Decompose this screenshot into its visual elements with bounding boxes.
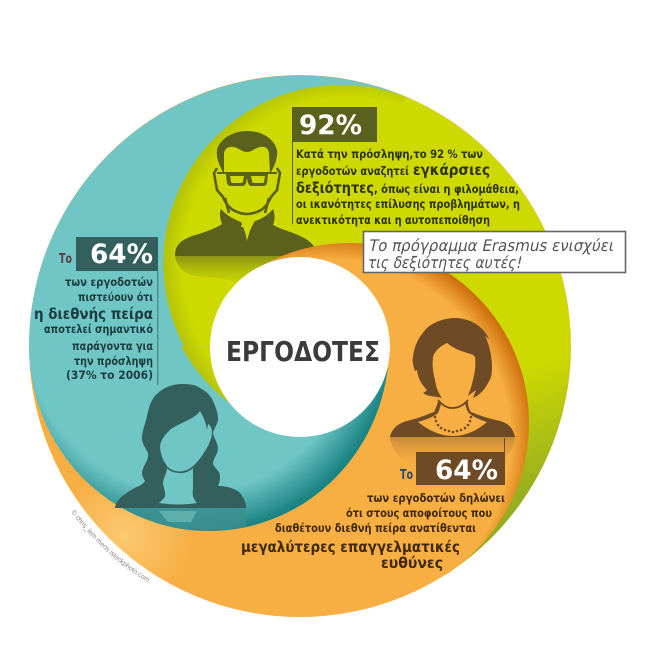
woman silhouette xyxy=(115,384,246,508)
text block: international experience: την πρόσληψη xyxy=(74,354,153,368)
stat box 64%: 64% xyxy=(90,239,153,270)
panel: left 64 percent xyxy=(34,237,158,385)
label To: Το xyxy=(400,468,413,483)
text block: responsibilities: διαθέτουν διεθνή πείρα ανατίθενται xyxy=(275,521,476,535)
stat box 64% xyxy=(416,452,505,486)
title: ΕΡΓΟΔΟΤΕΣ xyxy=(226,336,380,368)
text block: international experience: παράγοντα για xyxy=(72,339,153,353)
icon: woman with long hair xyxy=(115,384,246,535)
callout: Erasmus: τις δεξιότητες αυτές! xyxy=(366,253,524,272)
text block: responsibilities: ότι στους αποφοίτους που xyxy=(346,506,492,520)
label To: Το xyxy=(59,252,72,267)
stat box 64%: 64% xyxy=(435,455,498,486)
woman chin line xyxy=(167,467,193,472)
teal upper swirl xyxy=(29,75,406,347)
callout: Erasmus xyxy=(364,232,626,272)
woman hair xyxy=(413,318,492,398)
green tail shading xyxy=(181,346,300,429)
photo credit: © chris_lem mens istockphoto.com xyxy=(72,510,150,582)
text block: responsibilities: των εργοδοτών δηλώνει xyxy=(367,491,505,505)
text block: international experience xyxy=(34,275,153,382)
woman reflection xyxy=(390,437,515,466)
green edge shading xyxy=(163,85,406,429)
icon: woman with short hair and necklace xyxy=(390,318,515,466)
text block: skills: ανεκτικότητα και η αυτοπεποίθηση xyxy=(296,213,490,227)
green swirl xyxy=(163,85,571,575)
text block: skills: εγκάρσιες xyxy=(413,161,490,179)
orange swirl xyxy=(261,243,529,575)
stat box 92% xyxy=(292,107,377,142)
man body xyxy=(175,209,316,256)
text block: international experience: των εργοδοτών xyxy=(65,275,153,289)
text block: skills: οι ικανότητες επίλυσης προβλημάτων, η xyxy=(296,197,520,211)
text block: international experience: πιστεύουν ότι xyxy=(78,290,153,304)
text block: international experience: η διεθνής πείρα xyxy=(34,305,153,323)
woman body xyxy=(390,402,515,437)
woman neck xyxy=(159,465,197,504)
man reflection xyxy=(175,256,300,290)
necklace xyxy=(434,416,472,433)
man face outline xyxy=(214,168,280,214)
woman reflection xyxy=(122,508,246,531)
stat box 92%: 92% xyxy=(299,110,362,141)
text block: international experience: αποτελεί σημαντικό xyxy=(44,322,153,336)
text block: responsibilities: μεγαλύτερες επαγγελματικές xyxy=(241,538,460,556)
orange edge shading xyxy=(263,243,529,545)
text block: skills: Κατά την πρόσληψη,το 92 % των xyxy=(296,147,483,161)
man hair xyxy=(217,131,277,174)
orange base crescent xyxy=(29,75,571,617)
panel: 92 percent xyxy=(292,107,520,227)
woman jaw line xyxy=(438,400,468,408)
text block: skills: εργοδοτών αναζητεί xyxy=(296,164,409,178)
text block: responsibilities: ευθύνες xyxy=(381,554,443,572)
green tail xyxy=(181,346,300,429)
panel: right 64 percent xyxy=(241,438,505,572)
infographic: employers swirl xyxy=(29,75,626,617)
man glasses xyxy=(217,172,277,186)
woman face xyxy=(160,411,212,472)
text block: skills: δεξιότητες xyxy=(296,179,374,197)
white centre circle xyxy=(210,257,390,437)
teal lower swirl xyxy=(29,346,389,531)
text block: skills xyxy=(296,147,520,227)
woman face xyxy=(433,343,475,406)
text block: skills: , όπως είναι η φιλομάθεια, xyxy=(374,182,519,196)
teal edge shading xyxy=(29,346,389,531)
text block: international experience: (37% το 2006) xyxy=(66,368,153,382)
text block: responsibilities xyxy=(241,491,505,572)
callout: Erasmus: Το πρόγραμμα Erasmus ενισχύει xyxy=(366,236,616,255)
icon: man with glasses xyxy=(175,131,316,290)
